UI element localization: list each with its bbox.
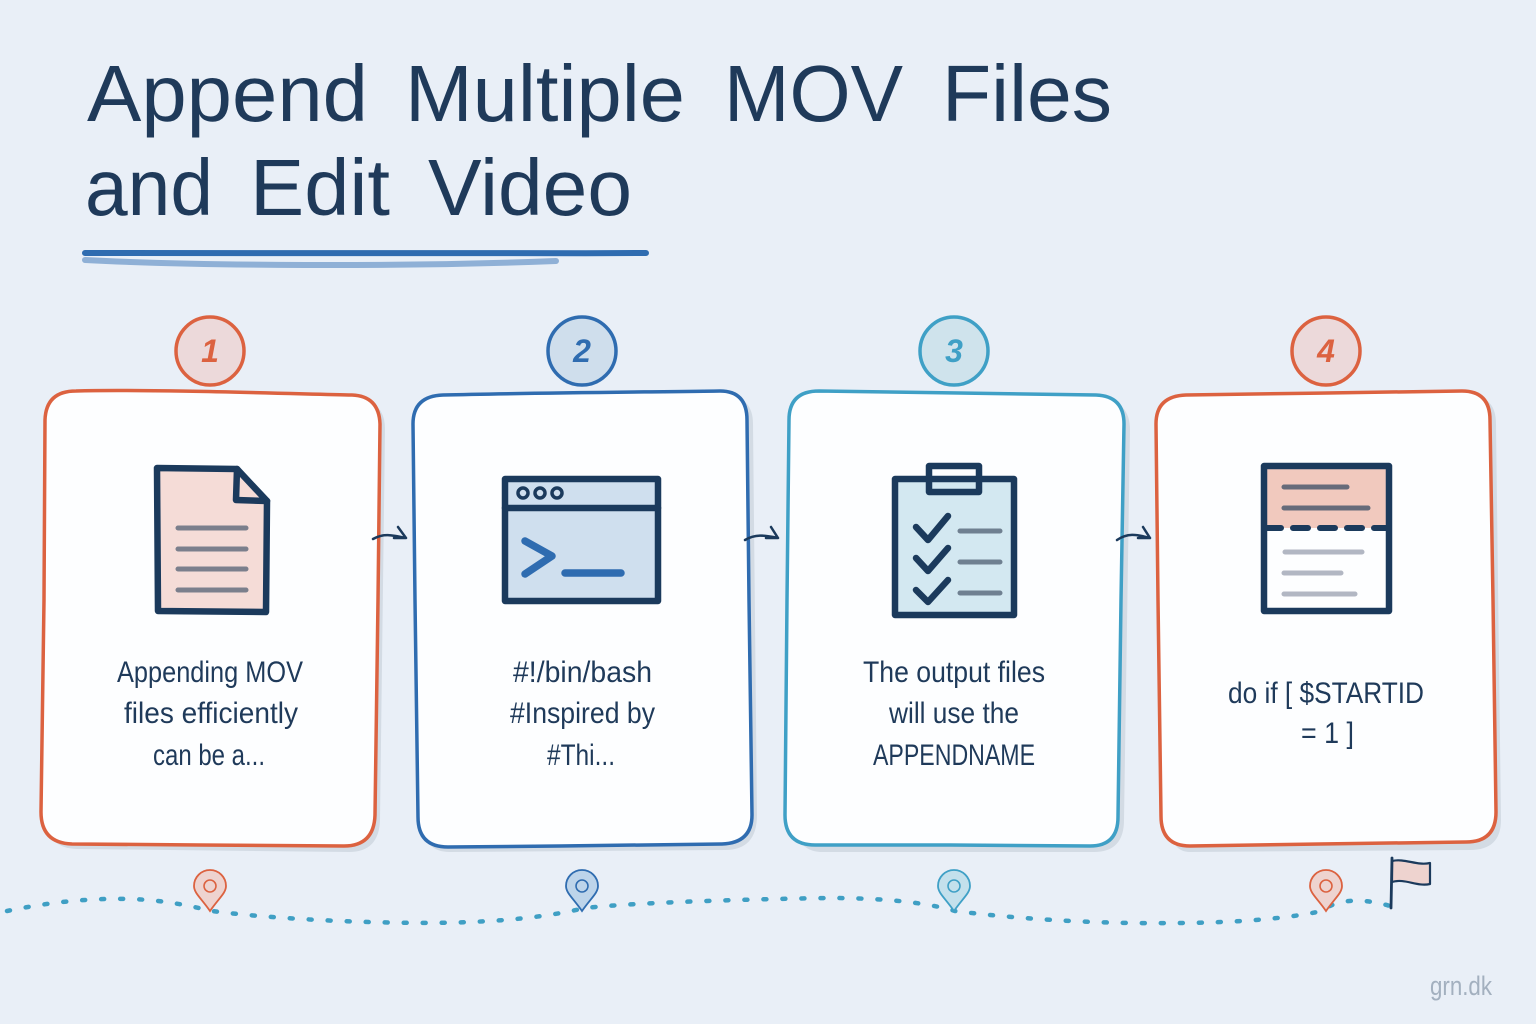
- step 4 text: do if [ $STARTID: [1228, 677, 1424, 710]
- title: Multiple: [405, 49, 685, 138]
- step number 2: 2: [572, 333, 591, 369]
- step 2 text: #!/bin/bash: [513, 656, 652, 689]
- map pin 4: [1310, 870, 1342, 911]
- watermark: grn.dk: [1430, 971, 1492, 1001]
- step 1 text: Appending MOV: [117, 656, 303, 689]
- step 3 text: will use the: [888, 697, 1019, 730]
- step 1 text: [117, 656, 303, 772]
- card 1 border: [41, 391, 380, 846]
- card 3 border: [785, 391, 1124, 846]
- step 1 text: files efficiently: [124, 697, 298, 730]
- step 3 text: APPENDNAME: [873, 739, 1035, 772]
- icon: split document: [1264, 466, 1389, 611]
- title: Append: [87, 49, 368, 138]
- panel: step 2: [413, 317, 757, 852]
- step number 3: 3: [945, 333, 963, 369]
- step 3 text: The output files: [863, 656, 1045, 689]
- step number 4: [1292, 317, 1360, 385]
- arrow: step 2 to 3: [745, 527, 778, 540]
- map pin 3: [938, 870, 970, 911]
- title: Video: [428, 143, 632, 232]
- panel: step 1: [41, 317, 385, 852]
- step 4 text: = 1 ]: [1301, 717, 1354, 750]
- step 2 text: [510, 656, 655, 772]
- title: and: [85, 143, 213, 232]
- step number 1: [176, 317, 244, 385]
- title underline: [85, 253, 646, 265]
- arrow: step 1 to 2: [373, 527, 406, 539]
- step 1 text: can be a...: [153, 739, 265, 772]
- title: Files: [942, 49, 1112, 138]
- card 4 border: [1156, 391, 1496, 846]
- icon: finish flag: [1391, 858, 1430, 908]
- title: Edit: [250, 143, 390, 232]
- icon: terminal window: [505, 479, 658, 601]
- step 4 text: [1228, 677, 1424, 750]
- title: [85, 49, 1112, 232]
- arrow: step 3 to 4: [1117, 527, 1150, 540]
- panel: step 4: [1156, 317, 1501, 852]
- step number 1: 1: [201, 333, 219, 369]
- icon: clipboard checklist: [895, 466, 1014, 615]
- dotted journey path: [7, 898, 1390, 923]
- panel: step 3: [785, 317, 1130, 852]
- step number 2: [548, 317, 616, 385]
- map pin 1: [194, 870, 226, 911]
- map pin 2: [566, 870, 598, 911]
- step 2 text: #Inspired by: [510, 697, 655, 730]
- step 2 text: #Thi...: [547, 739, 615, 772]
- step number 3: [920, 317, 988, 385]
- card 2 border: [413, 391, 752, 847]
- step 3 text: [863, 656, 1045, 772]
- icon: document: [157, 468, 267, 612]
- title: MOV: [724, 49, 904, 138]
- step number 4: 4: [1316, 333, 1335, 369]
